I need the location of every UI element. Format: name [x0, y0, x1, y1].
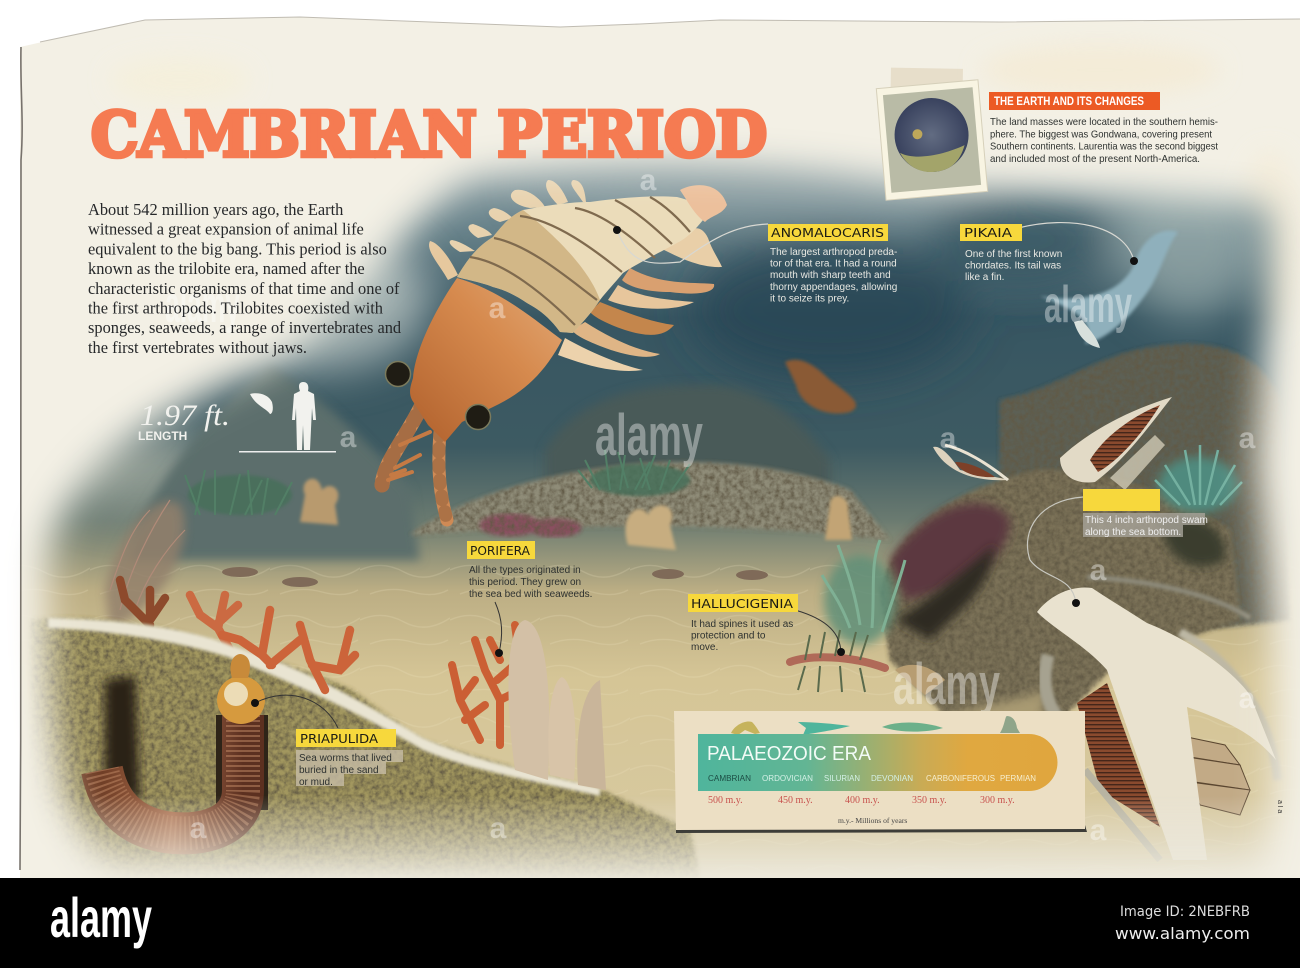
right rock mass [880, 344, 1290, 750]
intro text: equivalent to the big bang. This period is also [88, 240, 387, 258]
dates: 300 m.y. [980, 795, 1015, 806]
intro text: sponges, seaweeds, a range of invertebrates and [88, 318, 401, 337]
seaweed right [1155, 445, 1242, 513]
footnote: m.y.- Millions of years [838, 816, 907, 825]
paper stains [110, 44, 1300, 330]
intro text: witnessed a great expansion of animal life [88, 220, 364, 238]
intro text: known as the trilobite era, named after the [88, 259, 365, 278]
pointer [1027, 497, 1083, 607]
pointer [495, 602, 503, 657]
outer arcs [1087, 577, 1250, 618]
small a marks: a [1239, 682, 1256, 715]
watermarks: alamy [165, 276, 240, 334]
watermarks: alamy [595, 403, 703, 468]
description: All the types originated in [469, 565, 581, 576]
small a marks [190, 160, 1256, 847]
tag [960, 224, 1022, 241]
periods: CAMBRIAN [708, 773, 751, 783]
pointer [795, 610, 845, 656]
dates: 450 m.y. [778, 795, 813, 806]
description: along the sea bottom. [1085, 527, 1181, 538]
body: The land masses were located in the southern hemis- [990, 117, 1218, 128]
body: phere. The biggest was Gondwana, covering present [990, 130, 1212, 140]
tag: PORIFERA [470, 543, 530, 558]
background sponges [300, 479, 852, 550]
small a marks: a [1090, 814, 1107, 847]
intro text: characteristic organisms of that time and one of [88, 279, 400, 298]
handwritten length value: 1.97 ft. [140, 399, 230, 432]
timeline card [674, 711, 1087, 833]
intro text: the first vertebrates without jaws. [88, 338, 307, 357]
tag [688, 594, 798, 612]
small a marks: a [489, 292, 506, 325]
periods: ORDOVICIAN [762, 773, 813, 783]
corals back [120, 580, 238, 650]
scale: length [138, 382, 336, 452]
left rock with burrow [30, 618, 700, 880]
label: pikaia [960, 223, 1138, 283]
sand ripples [53, 565, 1258, 770]
description [296, 750, 403, 788]
small a marks: a [640, 164, 657, 197]
marrella large [1060, 397, 1172, 490]
description [1083, 513, 1208, 538]
pink seaweed [480, 514, 581, 537]
rock body [30, 618, 700, 880]
body: and included most of the present North-America. [990, 154, 1200, 165]
tag: HALLUCIGENIA [691, 596, 793, 611]
light in water [50, 160, 1260, 510]
small a marks: a [190, 812, 207, 845]
marrella small [933, 445, 1010, 480]
era bar [698, 734, 1058, 791]
small a marks: a [940, 160, 957, 193]
seabed ridge [410, 462, 890, 540]
watermarks: alamy [1044, 276, 1132, 334]
periods: PERMIAN [1000, 773, 1036, 783]
website: www.alamy.com [1115, 924, 1250, 943]
lower segments tint [457, 210, 600, 333]
gills [1077, 683, 1160, 827]
corals left [222, 610, 355, 690]
small a marks: a [340, 421, 357, 454]
polaroid: earth [875, 60, 988, 200]
era title: PALAEOZOIC ERA [707, 743, 872, 765]
stripes [470, 197, 690, 325]
top spines [429, 180, 586, 280]
description: This 4 inch arthropod swam [1085, 515, 1208, 526]
description: Sea worms that lived [299, 753, 392, 764]
periods: DEVONIAN [871, 773, 913, 783]
watermarks: alamy [893, 652, 1000, 717]
description: protection and to [691, 630, 766, 642]
label: hallucigenia [688, 594, 845, 656]
periods [708, 773, 1036, 783]
small a marks: a [1239, 422, 1256, 455]
lower rod [1085, 770, 1160, 860]
small a marks: a [940, 422, 957, 455]
pointer [251, 695, 338, 728]
footer bar [0, 878, 1300, 968]
small orange creature far [785, 360, 856, 413]
worm burrow shaft [216, 715, 268, 810]
description: buried in the sand [299, 765, 379, 776]
card [674, 711, 1085, 831]
ocean scene [0, 120, 1300, 880]
hallucigenia [790, 540, 945, 695]
creature: large marrella foreground [1037, 577, 1278, 860]
intro text: the first arthropods. Trilobites coexisted with [88, 298, 383, 318]
tag: PIKAIA [964, 225, 1013, 240]
dark cavity [105, 675, 140, 800]
photo [883, 87, 981, 193]
credit: a l a [1276, 800, 1283, 813]
description: the sea bed with seaweeds. [469, 589, 592, 600]
seaweed patches [188, 464, 690, 515]
sponges [508, 620, 549, 780]
tan segments [1187, 737, 1250, 815]
photo frame [876, 80, 988, 200]
description: The largest arthropod preda- [770, 247, 897, 258]
image id: Image ID: 2NEBFRB [1120, 904, 1250, 920]
tail appendages [382, 403, 447, 520]
label: porifera [467, 541, 592, 657]
inner ring [1045, 655, 1070, 728]
title: CAMBRIAN PERIOD [91, 98, 767, 171]
dates [708, 795, 1015, 806]
bottom fade [0, 795, 1300, 880]
water and sand base [0, 120, 1300, 880]
watermarks [165, 160, 1256, 847]
rock sand crust [48, 618, 600, 796]
creature: anomalocaris [382, 180, 727, 520]
description: mouth with sharp teeth and [770, 270, 891, 281]
animal silhouette [250, 393, 273, 414]
coral and sponges centre [452, 620, 606, 790]
blank tag [1083, 489, 1160, 511]
description: this period. They grew on [469, 577, 581, 588]
left seaweed brush [105, 500, 185, 630]
description: thorny appendages, allowing [770, 282, 897, 293]
era silhouettes [731, 716, 1020, 735]
footer logo: alamy [50, 886, 152, 949]
description: It had spines it used as [691, 619, 793, 630]
heading: THE EARTH AND ITS CHANGES [994, 96, 1144, 108]
bone plate [1037, 587, 1276, 860]
dates: 500 m.y. [708, 795, 743, 806]
segmented band [457, 196, 707, 333]
description: tor of that era. It had a round [770, 258, 897, 270]
human silhouette [292, 382, 316, 450]
coral [452, 625, 520, 745]
heading [989, 92, 1160, 110]
continents [900, 145, 967, 175]
head tip [680, 185, 727, 222]
ribs [558, 228, 722, 371]
orange carapace [410, 278, 562, 442]
tag: ANOMALOCARIS [771, 225, 884, 240]
scale ground line [239, 451, 336, 452]
small a marks: a [1090, 554, 1107, 587]
description: chordates. Its tail was [965, 260, 1061, 272]
description: One of the first known [965, 249, 1062, 260]
tag: PRIAPULIDA [300, 731, 378, 746]
pointer [1018, 223, 1138, 265]
worm body [102, 715, 243, 833]
intro text: About 542 million years ago, the Earth [88, 200, 343, 219]
label: anomalocaris [613, 224, 897, 304]
tape [891, 68, 963, 95]
description: it to seize its prey. [770, 294, 849, 304]
distant plants [185, 450, 690, 515]
periods: CARBONIFEROUS [926, 773, 995, 783]
small a marks: a [490, 812, 507, 845]
card shadow [676, 825, 1087, 833]
globe [891, 95, 972, 175]
description: move. [691, 642, 718, 653]
dates: 350 m.y. [912, 795, 947, 806]
periods: SILURIAN [824, 773, 860, 783]
creature: pikaia [1040, 231, 1178, 348]
length label: LENGTH [138, 429, 187, 443]
worm head [217, 654, 265, 724]
body: Southern continents. Laurentia was the second biggest [990, 142, 1218, 152]
earth changes note [989, 92, 1218, 165]
pointer [613, 224, 768, 263]
label: marrella (blank tag) [1027, 489, 1208, 607]
eyes [386, 362, 490, 430]
tag [296, 729, 396, 747]
dates: 400 m.y. [845, 795, 880, 806]
description: like a fin. [965, 272, 1004, 283]
label: priapulida [251, 695, 403, 788]
small arthropods on sand [222, 567, 768, 587]
description: or mud. [299, 777, 333, 788]
background hills [130, 365, 830, 560]
